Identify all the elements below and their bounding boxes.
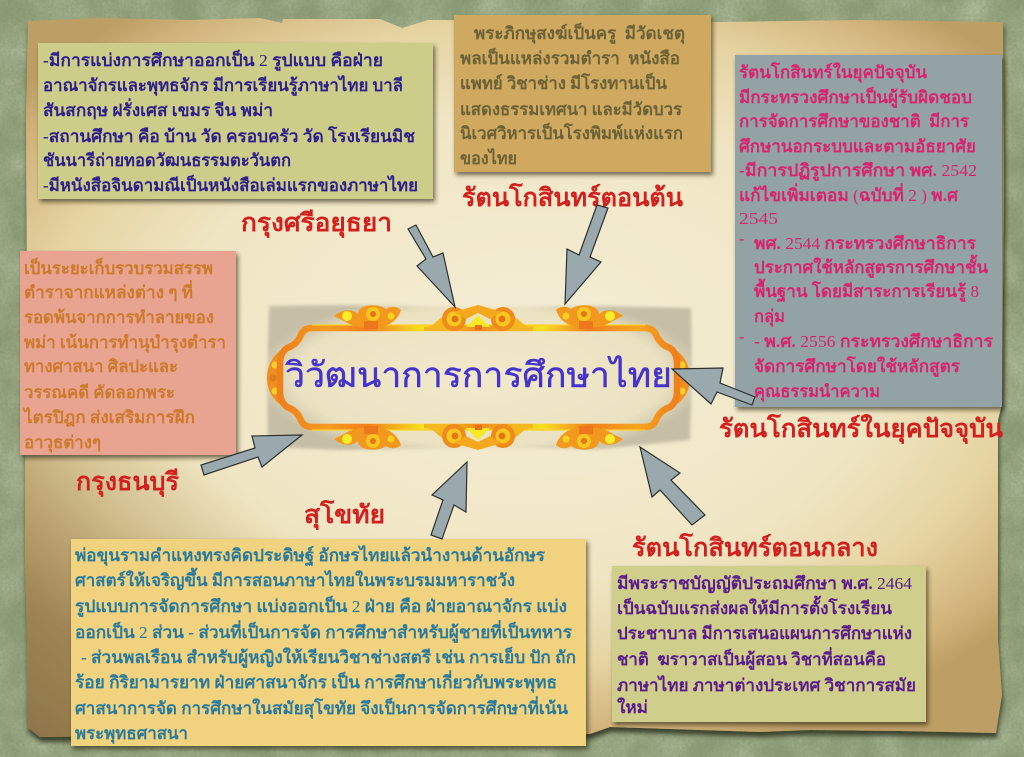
panel: early Rattanakosin text box — [454, 15, 711, 172]
panel: Thonburi text box — [20, 251, 236, 455]
panel: early Rattanakosin text box: แสดงธรรมเทศนา และมีวัดบวร — [460, 99, 683, 119]
panel: middle Rattanakosin text box: เป็นฉบับแรกส่งผลให้มีการตั้งโรงเรียน — [617, 595, 892, 618]
panel: Ayutthaya text box: -มีการแบ่งการศึกษาออกเป็น 2 รูปแบบ คือฝ่าย — [43, 48, 383, 72]
panel: middle Rattanakosin text box: มีพระราชบัญญัติประถมศึกษา พ.ศ. 2464 — [617, 573, 913, 594]
panel: middle Rattanakosin text box: ประชาบาล มีการเสนอแผนการศึกษาแห่ง — [617, 623, 912, 643]
panel: middle Rattanakosin text box — [612, 566, 926, 722]
panel: Sukhothai text box: พระพุทธศาสนา — [75, 724, 188, 744]
panel: middle Rattanakosin text box: ชาติ ฆราวาสเป็นผู้สอน วิชาที่สอนคือ — [617, 647, 886, 671]
panel: Thonburi text box: เป็นระยะเก็บรวบรวมสรรพ — [24, 256, 213, 278]
panel: contemporary Rattanakosin text box: - — [739, 229, 745, 248]
panel: Ayutthaya text box: อาณาจักรและพุทธจักร มีการเรียนรู้ภาษาไทย บาลี — [43, 75, 403, 97]
panel: Sukhothai text box: รูปแบบการจัดการศึกษา แบ่งออกเป็น 2 ฝ่าย คือ ฝ่ายอาณาจักร แบ่ง — [75, 594, 567, 618]
panel: contemporary Rattanakosin text box: พศ. 2544 กระทรวงศึกษาธิการ — [754, 234, 977, 253]
panel: contemporary Rattanakosin text box: 2545 — [739, 209, 778, 228]
panel: contemporary Rattanakosin text box: - — [739, 327, 745, 346]
panel: Ayutthaya text box: -สถานศึกษา คือ บ้าน วัด ครอบครัว วัด โรงเรียนมิช — [43, 126, 415, 146]
panel: Thonburi text box: พม่า เน้นการทำนุบำรุงตำรา — [24, 333, 226, 353]
panel: Ayutthaya text box: สันสกฤษ ฝรั่งเศส เขมร จีน พม่า — [43, 98, 273, 120]
panel: contemporary Rattanakosin text box: -มีการปฏิรูปการศึกษา พศ. 2542 — [739, 160, 977, 182]
panel: contemporary Rattanakosin text box: กลุ่ม — [754, 307, 785, 327]
panel: contemporary Rattanakosin text box: จัดการศึกษาโดยใช้หลักสูตร — [754, 356, 961, 378]
panel: contemporary Rattanakosin text box: พื้นฐาน โดยมีสาระการเรียนรู้ 8 — [754, 278, 979, 303]
panel: Sukhothai text box — [71, 539, 586, 746]
central title banner — [267, 305, 692, 450]
panel: Sukhothai text box: ศาสนาการจัด การศึกษาในสมัยสุโขทัย จึงเป็นการจัดการศึกษาที่เน้น — [75, 696, 568, 719]
arrow: middle Rattanakosin to title — [640, 447, 705, 525]
panel: early Rattanakosin text box: พระภิกษุสงฆ์เป็นครู มีวัดเชตุ — [474, 21, 685, 45]
arrow: contemporary Rattanakosin to title — [672, 368, 755, 405]
panel: Sukhothai text box: - ส่วนพลเรือน สำหรับผู้หญิงให้เรียนวิชาช่างสตรี เช่น การเย็บ ปัก ถัก — [81, 645, 576, 669]
panel: Sukhothai text box: ออกเป็น 2 ส่วน - ส่วนที่เป็นการจัด การศึกษาสำหรับผู้ชายที่เป็นทหาร — [75, 620, 573, 644]
panel: contemporary Rattanakosin text box: มีกระทรวงศึกษาเป็นผู้รับผิดชอบ — [739, 85, 972, 109]
panel: contemporary Rattanakosin text box: รัตนโกสินทร์ในยุคปัจจุบัน — [739, 62, 927, 83]
arrow: early Rattanakosin to title — [565, 205, 608, 304]
panel: early Rattanakosin text box: แพทย์ วิชาช่าง มีโรงทานเป็น — [460, 71, 667, 93]
panel: Ayutthaya text box: ชันนารีถ่ายทอดวัฒนธรรมตะวันตก — [43, 150, 291, 170]
panel: early Rattanakosin text box: พลเป็นแหล่งรวมตำรา หนังสือ — [460, 46, 680, 68]
panel: contemporary Rattanakosin text box: แก้ไขเพิ่มเตอม (ฉบับที่ 2 ) พ.ศ — [739, 183, 959, 205]
panel: early Rattanakosin text box: นิเวศวิหารเป็นโรงพิมพ์แห่งแรก — [460, 121, 683, 143]
panel: Thonburi text box: ทางศาสนา ศิลปะและ — [24, 357, 178, 376]
arrow: Ayutthaya to title — [408, 225, 455, 307]
panel: Thonburi text box: ไตรปิฎก ส่งเสริมการฝึก — [22, 407, 195, 427]
panel: contemporary Rattanakosin text box: ประกาศใช้หลักสูตรการศึกษาชั้น — [754, 254, 988, 279]
arrow: Thonburi to title — [201, 435, 302, 475]
panel: contemporary Rattanakosin text box: ศึกษานอกระบบและตามอัธยาศัย — [739, 137, 976, 156]
heading: contemporary Rattanakosin: รัตนโกสินทร์ในยุคปัจจุบัน — [719, 413, 1003, 445]
panel: middle Rattanakosin text box: ใหม่ — [617, 697, 648, 717]
heading: middle Rattanakosin: รัตนโกสินทร์ตอนกลาง — [632, 532, 878, 562]
panel: Thonburi text box: รอดพ้นจากการทำลายของ — [24, 308, 214, 327]
ornate gold frame — [267, 305, 690, 450]
panel: contemporary Rattanakosin text box — [735, 55, 1002, 407]
panel: Thonburi text box: วรรณคดี คัดลอกพระ — [24, 382, 175, 402]
heading: early Rattanakosin: รัตนโกสินทร์ตอนต้น — [462, 182, 683, 212]
heading: Sukhothai: สุโขทัย — [304, 499, 385, 531]
panel: Ayutthaya text box: -มีหนังสือจินดามณีเป็นหนังสือเล่มแรกของภาษาไทย — [43, 173, 418, 195]
panel: early Rattanakosin text box: ของไทย — [460, 148, 517, 168]
panel: contemporary Rattanakosin text box: การจัดการศึกษาของชาติ มีการ — [739, 111, 970, 131]
heading: Ayutthaya: กรุงศรีอยุธยา — [241, 209, 392, 239]
panel: Sukhothai text box: ศาสตร์ให้เจริญขึ้น มีการสอนภาษาไทยในพระบรมมหาราชวัง — [75, 567, 515, 591]
panel: middle Rattanakosin text box: ภาษาไทย ภาษาต่างประเทศ วิชาการสมัย — [617, 675, 916, 695]
panel: Thonburi text box: ตำราจากแหล่งต่าง ๆ ที่ — [24, 280, 193, 302]
torn paper plate — [267, 305, 692, 450]
panel: contemporary Rattanakosin text box: คุณธรรมนำความ — [754, 382, 880, 402]
panel: contemporary Rattanakosin text box: - พ.ศ. 2556 กระทรวงศึกษาธิการ — [754, 332, 994, 351]
panel: Thonburi text box: อาวุธต่างๆ — [24, 433, 101, 453]
title: วิวัฒนาการการศึกษาไทย — [285, 355, 672, 395]
panel: Sukhothai text box: พ่อขุนรามคำแหงทรงคิดประดิษฐ์ อักษรไทยแล้วนำงานด้านอักษร — [75, 545, 546, 567]
heading: Thonburi: กรุงธนบุรี — [76, 468, 180, 498]
panel: Ayutthaya text box — [38, 43, 433, 199]
arrow: Sukhothai to title — [431, 462, 467, 539]
panel: Sukhothai text box: ร้อย กิริยามารยาท ฝ่ายศาสนาจักร เป็น การศึกษาเกี่ยวกับพระพุทธ — [75, 670, 557, 693]
